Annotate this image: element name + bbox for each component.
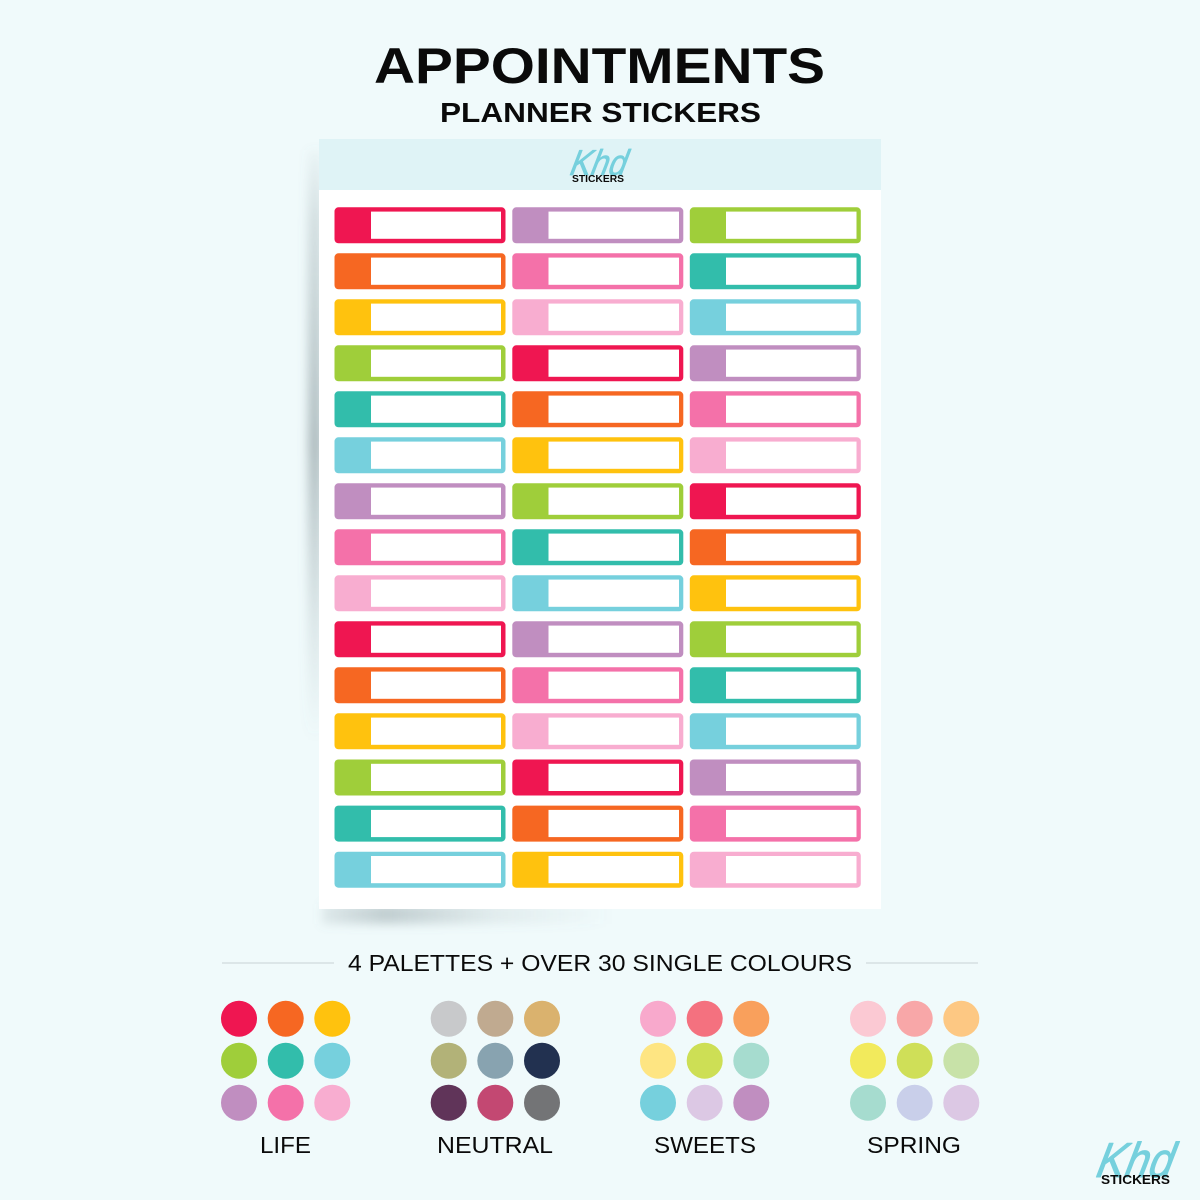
sticker — [690, 760, 861, 796]
sticker — [690, 391, 861, 427]
sticker — [334, 529, 506, 565]
label: sweets: SWEETS — [654, 1132, 756, 1158]
sticker — [334, 345, 506, 381]
sticker — [512, 207, 683, 243]
sticker — [512, 806, 683, 842]
sticker — [690, 529, 861, 565]
sticker — [512, 575, 683, 611]
palettes heading: 4 PALETTES + OVER 30 SINGLE COLOURS — [348, 950, 852, 976]
sticker — [690, 575, 861, 611]
logo: Khd Stickers corner: STICKERS — [1101, 1172, 1170, 1187]
sticker — [690, 852, 861, 888]
sticker sheet — [308, 139, 881, 924]
sticker — [512, 437, 683, 473]
sticker — [512, 760, 683, 796]
sticker — [334, 575, 506, 611]
sticker — [334, 391, 506, 427]
sheet header band — [319, 139, 881, 190]
sticker — [512, 391, 683, 427]
sticker — [690, 713, 861, 749]
sticker — [690, 806, 861, 842]
sticker — [512, 667, 683, 703]
palette: spring — [850, 1001, 979, 1158]
palette: sweets — [640, 1001, 769, 1158]
sticker — [512, 529, 683, 565]
sticker column 1 — [334, 207, 506, 888]
sticker — [334, 852, 506, 888]
label: life: LIFE — [260, 1132, 311, 1158]
sticker — [334, 667, 506, 703]
sticker — [690, 667, 861, 703]
palette: life — [221, 1001, 350, 1158]
sticker — [690, 253, 861, 289]
sticker — [334, 621, 506, 657]
sticker — [512, 852, 683, 888]
title: APPOINTMENTS — [374, 38, 825, 94]
subtitle: PLANNER STICKERS — [440, 97, 761, 128]
sticker — [512, 483, 683, 519]
label: spring: SPRING — [867, 1132, 961, 1158]
sticker — [334, 299, 506, 335]
sticker — [690, 621, 861, 657]
sticker — [512, 253, 683, 289]
logo: Khd Stickers header: Khd — [567, 142, 633, 183]
sticker — [690, 345, 861, 381]
logo: Khd Stickers corner: Khd — [1093, 1132, 1182, 1188]
logo: Khd Stickers header: STICKERS — [572, 174, 624, 185]
sticker — [690, 437, 861, 473]
sticker — [512, 345, 683, 381]
sticker — [334, 713, 506, 749]
palette: neutral — [431, 1001, 560, 1158]
sticker — [690, 483, 861, 519]
sticker — [512, 713, 683, 749]
sticker — [334, 483, 506, 519]
label: neutral: NEUTRAL — [437, 1132, 553, 1158]
sticker — [334, 437, 506, 473]
sticker — [512, 299, 683, 335]
sticker column 2 — [512, 207, 683, 888]
sticker — [512, 621, 683, 657]
sticker — [334, 760, 506, 796]
sticker column 3 — [690, 207, 861, 888]
sticker — [690, 207, 861, 243]
sticker — [334, 806, 506, 842]
sticker — [334, 253, 506, 289]
sticker — [334, 207, 506, 243]
sticker — [690, 299, 861, 335]
